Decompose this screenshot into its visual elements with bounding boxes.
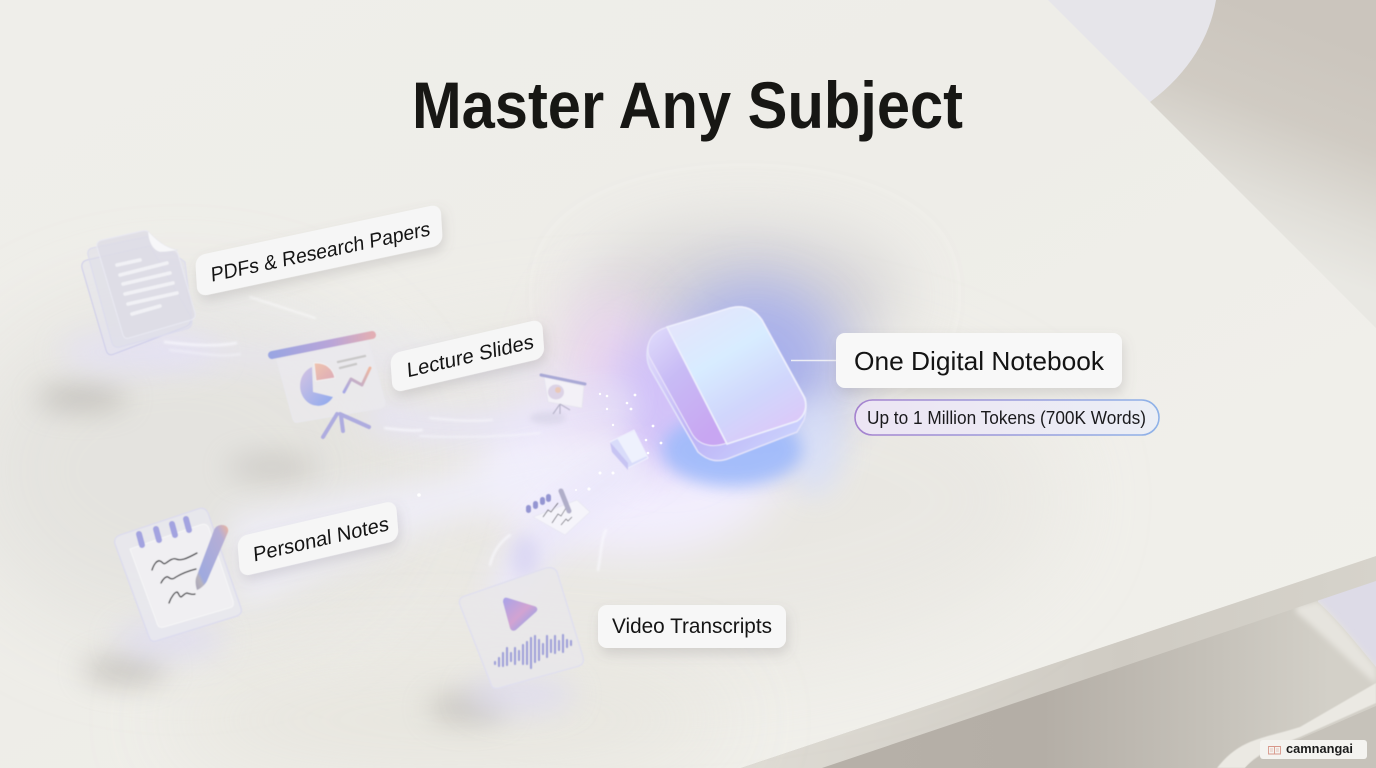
icon: personal notes pad	[115, 508, 241, 641]
table front edge	[741, 556, 1376, 768]
label: One Digital Notebook	[836, 333, 1122, 388]
icon: mini notebook cube in flow	[610, 430, 648, 470]
connector line to notebook label	[791, 360, 836, 362]
folded page corner	[148, 231, 178, 252]
background: room behind the table	[742, 0, 1376, 768]
soft shading on table	[0, 300, 1060, 768]
spiral binding	[139, 519, 189, 545]
central glow	[480, 225, 905, 555]
pencil	[196, 525, 228, 590]
flow particles	[417, 393, 662, 497]
spine of notebook	[648, 327, 727, 446]
handwriting squiggles	[152, 553, 197, 603]
line chart	[344, 368, 370, 392]
icon: mini notes in flow	[526, 491, 590, 535]
label: Lecture Slides: Lecture Slides	[406, 330, 534, 382]
label: One Digital Notebook: One Digital Notebook	[854, 346, 1105, 376]
object shadows on table	[36, 330, 575, 722]
pill: token capacity	[855, 400, 1159, 435]
label: Video Transcripts	[598, 605, 786, 648]
lavender wall below table	[1318, 576, 1376, 667]
icon: lecture slides presentation	[272, 335, 385, 437]
pill: token capacity: Up to 1 Million Tokens (700K Words)	[867, 408, 1146, 428]
pie chart	[300, 367, 333, 406]
central digital notebook icon	[647, 307, 806, 461]
icon: open book	[1268, 746, 1280, 754]
label: Lecture Slides	[390, 319, 545, 393]
label: Personal Notes	[237, 500, 399, 577]
presentation top bar	[272, 335, 372, 355]
slide text lines	[338, 356, 365, 368]
icon: video transcript tile	[459, 568, 583, 688]
label: Personal Notes: Personal Notes	[252, 512, 390, 567]
label: PDFs & Research Papers: PDFs & Research Papers	[210, 217, 431, 287]
icon: PDF documents stack	[82, 231, 195, 355]
watermark: camnangai	[1260, 740, 1367, 759]
watermark: camnangai: camnangai	[1286, 741, 1353, 756]
tripod	[323, 414, 369, 437]
label: Video Transcripts: Video Transcripts	[612, 614, 772, 638]
document text lines	[117, 260, 177, 314]
flow streams toward notebook	[160, 297, 625, 610]
notebook cover	[667, 307, 806, 444]
title: Master Any Subject	[412, 68, 963, 142]
audio waveform	[495, 635, 571, 668]
icon: mini slide in flow	[530, 375, 585, 424]
play triangle	[503, 598, 537, 631]
